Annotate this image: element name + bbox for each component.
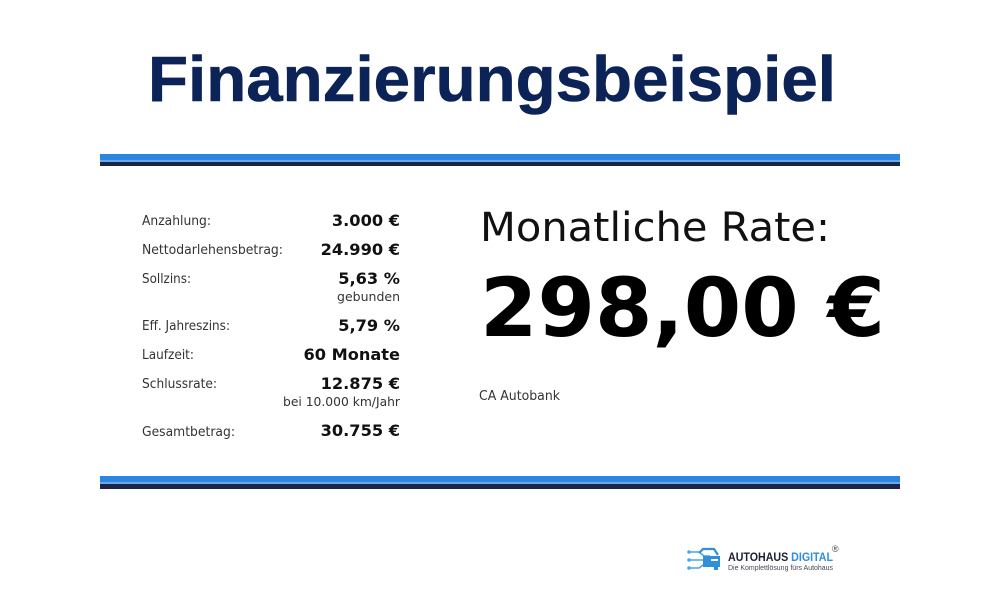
row: Laufzeit [142,345,400,364]
row: Schlussrate: bei 10.000 km/Jahr [283,394,401,409]
row: Laufzeit: 60 Monate [303,345,400,364]
row: Eff. Jahreszins: 5,79 % [338,316,400,335]
row: Laufzeit: Laufzeit: [142,347,194,363]
row: Sollzins: Sollzins: [142,271,191,287]
panel: financing details [142,211,401,440]
title: Finanzierungsbeispiel [148,43,836,115]
tagline: Die Komplettlösung fürs Autohaus [728,563,833,572]
row: Nettodarlehensbetrag [142,240,400,259]
registered mark: ® [832,544,839,554]
brand name: AUTOHAUS DIGITAL [728,552,833,564]
logo: Autohaus Digital [687,544,839,572]
row: Sollzins [142,269,400,304]
row: Nettodarlehensbetrag: Nettodarlehensbetrag: [142,242,283,258]
row: Schlussrate: Schlussrate: [142,376,217,392]
row: Gesamtbetrag: 30.755 € [321,421,400,440]
row: Anzahlung: Anzahlung: [142,213,211,229]
row: Gesamtbetrag: Gesamtbetrag: [142,424,235,440]
row: Eff. Jahreszins [142,316,400,335]
icon: car with circuit lines [687,549,720,570]
row: Schlussrate [142,374,401,409]
heading: Monatliche Rate: Monatliche Rate: [480,205,830,251]
bottom divider [100,476,900,489]
row: Sollzins: gebunden [337,289,400,304]
bank name: CA Autobank [479,388,560,404]
row: Anzahlung [142,211,400,230]
row: Eff. Jahreszins: Eff. Jahreszins: [142,318,230,334]
row: Nettodarlehensbetrag: 24.990 € [321,240,400,259]
row: Sollzins: 5,63 % [338,269,400,288]
monthly rate value: 298,00 € [480,262,885,356]
row: Anzahlung: 3.000 € [332,211,400,230]
row: Schlussrate: 12.875 € [321,374,400,393]
row: Gesamtbetrag [142,421,400,440]
top divider [100,154,900,166]
